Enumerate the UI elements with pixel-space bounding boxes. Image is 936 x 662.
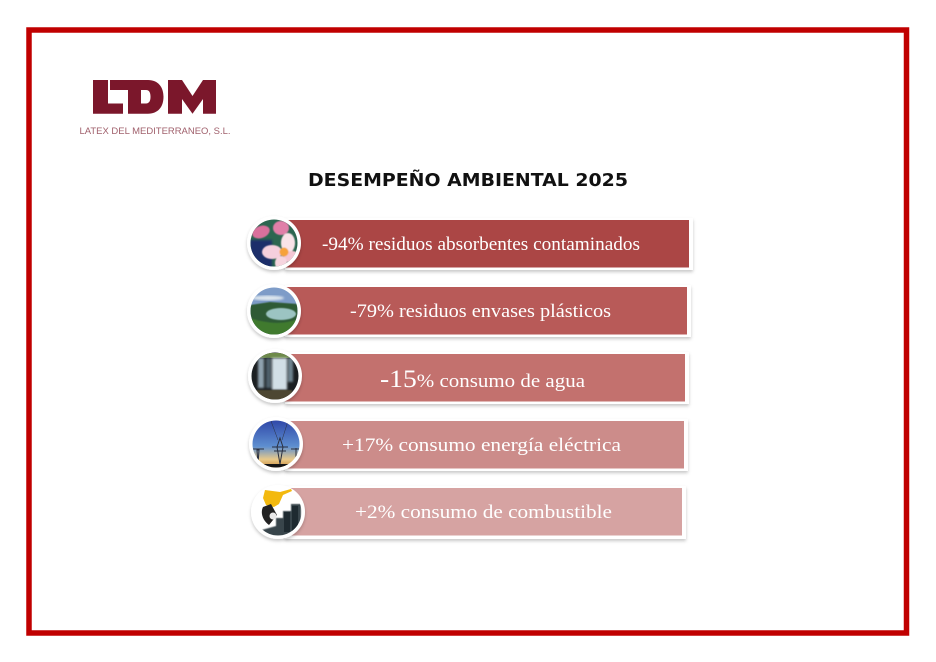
bar 3 [285,352,689,404]
row 1: residuos absorbentes [247,216,693,270]
icon: fuel nozzle [251,485,305,539]
label 2: -79% residuos envases plásticos [350,301,611,322]
label 5: +2% consumo de combustible [355,502,612,523]
logo: LDM [80,80,230,137]
bar 2 [285,285,691,337]
logo subtitle: LATEX DEL MEDITERRANEO, S.L. [80,126,230,137]
icon: landscape [247,284,301,338]
row 3: consumo de agua [248,349,689,404]
label 4: +17% consumo energía eléctrica [342,435,622,456]
row 5: consumo combustible [251,485,686,539]
icon: waterfall [248,349,302,403]
title: DESEMPEÑO AMBIENTAL 2025 [308,168,628,191]
row 2: residuos envases [247,284,691,338]
icon: flower [247,216,301,270]
label 3: -15% consumo de agua [380,366,586,393]
bar 4 [285,419,688,471]
row 4: consumo energía [249,417,688,471]
bar 1 [285,218,693,270]
bar 5 [285,486,686,539]
icon: power pylons [249,417,303,471]
label 1: -94% residuos absorbentes contaminados [322,234,640,255]
logo mark [93,80,216,114]
